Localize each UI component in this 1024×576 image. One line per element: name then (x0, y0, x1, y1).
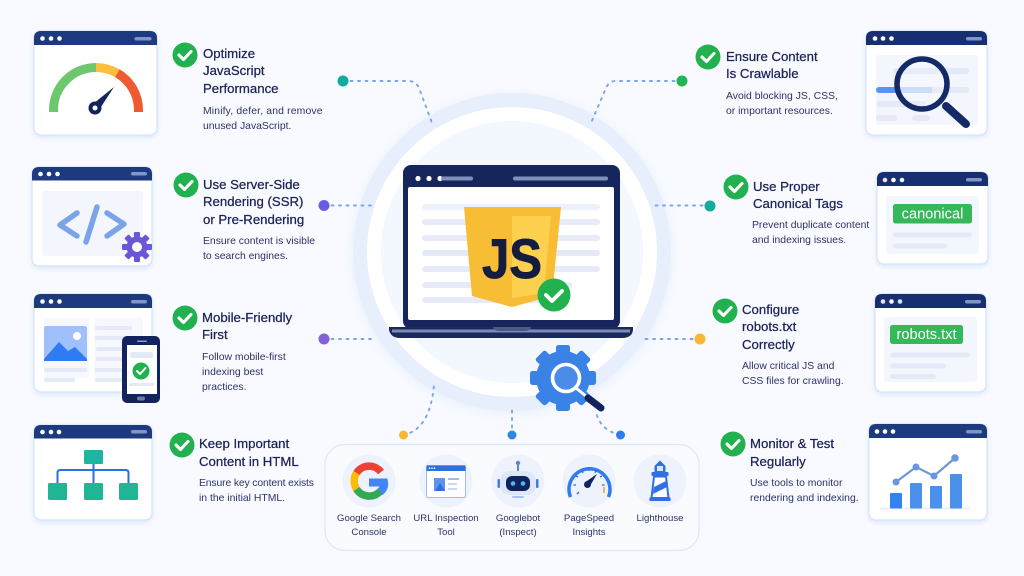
card: gauge (34, 31, 157, 135)
text: Use tools to monitor (750, 478, 842, 489)
text: Allow critical JS and (742, 361, 834, 372)
card: hierarchy (34, 425, 152, 520)
heading: Is Crawlable (726, 66, 799, 81)
card: magnifier (866, 31, 987, 135)
heading: Correctly (742, 337, 795, 352)
icon: check (174, 172, 198, 198)
icon: check (172, 42, 198, 68)
text: practices. (202, 382, 246, 393)
heading: Configure (742, 302, 799, 317)
heading: Canonical Tags (753, 196, 843, 211)
dots: connector endpoints (318, 76, 716, 440)
panel: monitor and test (720, 424, 987, 520)
panel: tools (325, 444, 699, 550)
heading: Content in HTML (199, 454, 299, 469)
icon: check (696, 44, 720, 70)
heading: Use Proper (753, 179, 820, 194)
heading: JavaScript (203, 63, 265, 78)
tool: URL Inspection Tool (413, 454, 479, 538)
card: page and phone (34, 294, 160, 403)
text: CSS files for crawling. (742, 376, 844, 387)
text: indexing best (202, 367, 263, 378)
tool: Google Search Console: Google Search (337, 513, 401, 524)
heading: Monitor & Test (750, 436, 834, 451)
text: or important resources. (726, 106, 833, 117)
icon: gear with magnifier (530, 345, 601, 411)
central circle (352, 93, 672, 414)
card: canonical (877, 172, 988, 264)
tool: Googlebot (492, 454, 544, 538)
panel: robots.txt (712, 294, 986, 392)
tool: PageSpeed Insights: PageSpeed (564, 513, 614, 524)
heading: Performance (203, 81, 278, 96)
heading: Mobile-Friendly (202, 310, 292, 325)
card: robots (875, 294, 986, 392)
text: to search engines. (203, 251, 288, 262)
heading: Use Server-Side (203, 177, 300, 192)
text: unused JavaScript. (203, 121, 291, 132)
JS shield logo: JS (482, 227, 542, 290)
icon: check (170, 432, 194, 458)
JS shield logo (464, 207, 570, 312)
text: Ensure content is visible (203, 236, 315, 247)
heading: Ensure Content (726, 49, 818, 64)
heading: First (202, 327, 228, 342)
panel: canonical tags (724, 172, 988, 264)
tool: Google Search Console (337, 454, 401, 538)
tool: PageSpeed Insights (562, 454, 616, 538)
icon: check (712, 298, 738, 324)
tool: PageSpeed Insights: Insights (572, 527, 606, 538)
text: and indexing issues. (752, 235, 846, 246)
icon: check (724, 174, 748, 200)
laptop (389, 165, 633, 338)
heading: or Pre-Rendering (203, 212, 304, 227)
tool: Googlebot: Googlebot (496, 513, 540, 524)
text: Follow mobile-first (202, 352, 286, 363)
tool: URL Inspection Tool: URL Inspection (413, 513, 479, 524)
tool: Lighthouse: Lighthouse (637, 513, 683, 524)
panel: mobile friendly (34, 294, 293, 403)
panel: server side rendering (32, 167, 315, 266)
panel: optimize javascript performance (34, 31, 323, 135)
panel: ensure content is crawlable (696, 31, 987, 135)
text: Minify, defer, and remove (203, 106, 323, 117)
icon: check (720, 432, 746, 456)
panel: keep content in html (34, 425, 314, 520)
tool: Lighthouse (634, 454, 686, 524)
text: Prevent duplicate content (752, 220, 869, 231)
heading: Regularly (750, 454, 806, 469)
heading: Keep Important (199, 436, 289, 451)
heading: Optimize (203, 46, 255, 61)
card: robots: robots.txt (896, 327, 957, 343)
card: code (32, 167, 152, 266)
text: rendering and indexing. (750, 493, 859, 504)
card: canonical: canonical (902, 206, 963, 222)
tool: Googlebot: (Inspect) (499, 527, 537, 538)
heading: Rendering (SSR) (203, 194, 303, 209)
connector: dotted lines (324, 81, 710, 435)
icon: check (172, 306, 198, 330)
text: Avoid blocking JS, CSS, (726, 91, 838, 102)
card: chart (869, 424, 987, 520)
tool: Google Search Console: Console (351, 527, 387, 538)
text: in the initial HTML. (199, 493, 285, 504)
text: Ensure key content exists (199, 478, 314, 489)
tool: URL Inspection Tool: Tool (437, 527, 455, 538)
heading: robots.txt (742, 319, 797, 334)
